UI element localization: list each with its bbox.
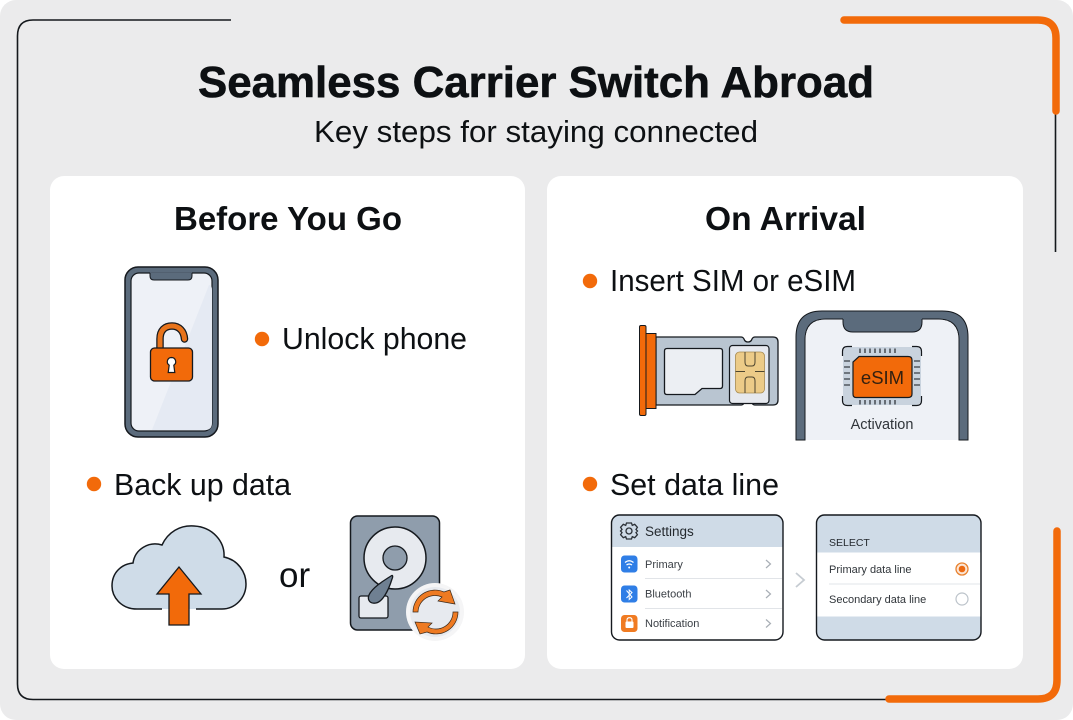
text: activation: Activation bbox=[851, 417, 913, 433]
heading: before you go: Before You Go bbox=[174, 200, 402, 237]
arrow: next screen bbox=[796, 573, 804, 587]
bullet: unlock phone: Unlock phone bbox=[282, 321, 467, 356]
row: primary: Primary bbox=[645, 559, 683, 571]
bullet: insert sim or esim: Insert SIM or eSIM bbox=[610, 263, 856, 298]
bullet: back up data: Back up data bbox=[114, 467, 292, 502]
option: primary data line: Primary data line bbox=[829, 564, 912, 576]
panel: on arrival bbox=[547, 176, 1023, 669]
frame: orange bottom-right accent bbox=[889, 531, 1057, 699]
select screen bbox=[816, 515, 981, 640]
row: primary bbox=[621, 556, 770, 572]
icon: unlocked phone bbox=[125, 267, 218, 437]
row: notification: Notification bbox=[645, 618, 699, 630]
row: notification bbox=[621, 615, 770, 632]
icon: cloud upload bbox=[112, 526, 246, 625]
row: bluetooth: Bluetooth bbox=[645, 588, 691, 600]
text: select: SELECT bbox=[829, 537, 870, 549]
icon: hard drive backup bbox=[350, 516, 464, 641]
text: settings header: Settings bbox=[645, 524, 694, 539]
settings screen bbox=[612, 515, 783, 640]
option: secondary data line bbox=[829, 593, 968, 606]
panel: before you go bbox=[50, 176, 525, 669]
option: secondary data line: Secondary data line bbox=[829, 594, 926, 606]
icon: gear bbox=[620, 523, 638, 539]
subtitle: Key steps for staying connected bbox=[314, 114, 758, 149]
row: bluetooth bbox=[621, 586, 770, 602]
title: Seamless Carrier Switch Abroad bbox=[198, 58, 874, 107]
icon: esim phone bbox=[796, 311, 968, 440]
frame: orange top-right accent bbox=[844, 20, 1056, 111]
chip: esim bbox=[842, 346, 922, 406]
icon: sim tray bbox=[640, 326, 778, 416]
bullet: set data line: Set data line bbox=[610, 467, 779, 502]
text: or: or bbox=[279, 556, 310, 595]
option: primary data line bbox=[829, 563, 968, 576]
chip: esim: eSIM bbox=[861, 367, 904, 388]
heading: on arrival: On Arrival bbox=[705, 200, 866, 237]
